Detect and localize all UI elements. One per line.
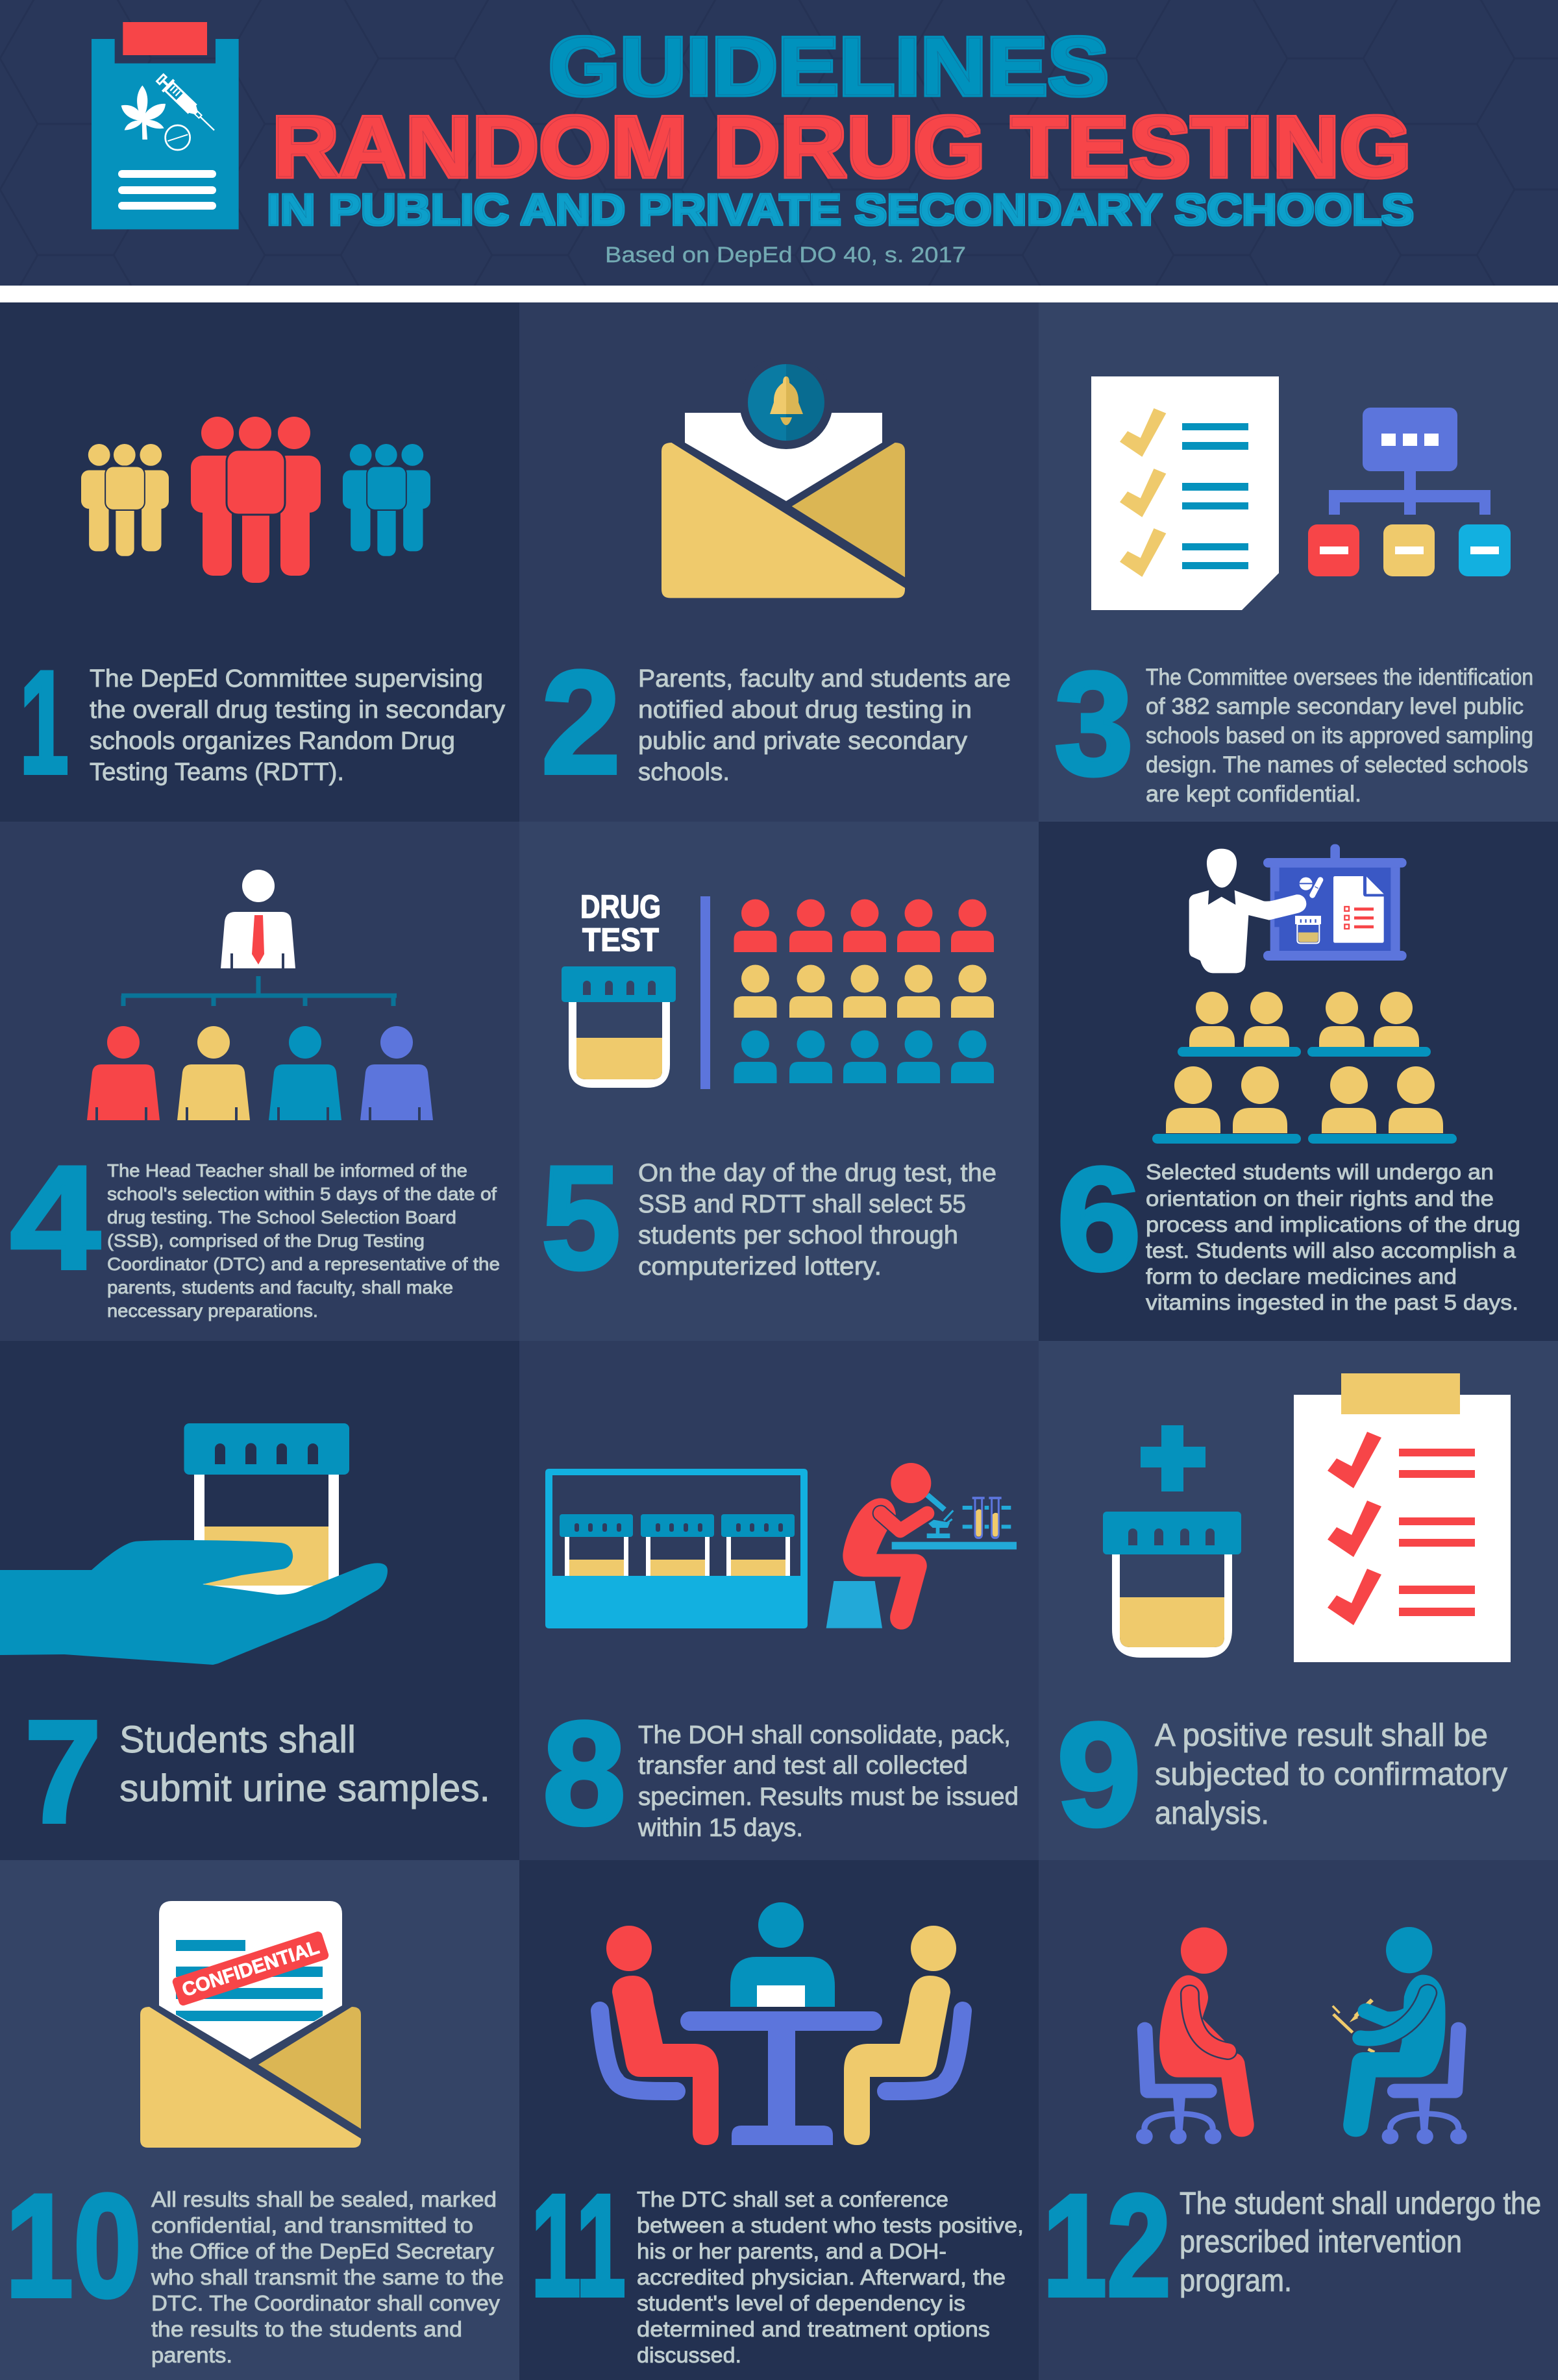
text: step 9: A positive result shall be: [1155, 1718, 1488, 1753]
number 10: 10: [5, 2163, 142, 2327]
title: Random Drug Testing: RANDOM DRUG TESTING: [272, 99, 1411, 195]
text: step 10: the results to the students and: [151, 2317, 462, 2341]
icon: clipboard with leaf, syringe and pill: [92, 22, 239, 229]
text: step 10: confidential, and transmitted to: [151, 2213, 473, 2237]
panel: step 11: [519, 1860, 1039, 2380]
text: step 3: [1146, 665, 1533, 807]
text: step 8: within 15 days.: [637, 1814, 803, 1842]
text: step 11: his or her parents, and a DOH-: [637, 2239, 946, 2263]
panel: step 8: [519, 1341, 1039, 1860]
text: step 10: who shall transmit the same to the: [151, 2265, 504, 2289]
text: step 2: schools.: [638, 759, 730, 786]
panel: step 4: [0, 822, 519, 1341]
text: step 3: are kept confidential.: [1146, 781, 1361, 807]
icon: drug test cup: DRUG: [580, 889, 661, 925]
icon: drug test cup: TEST: [582, 922, 659, 958]
title: Guidelines: GUIDELINES: [549, 20, 1109, 112]
panel: step 9: [1039, 1341, 1558, 1860]
panel: step 12: [1039, 1860, 1558, 2380]
text: step 6: [1146, 1160, 1520, 1314]
icon: drug test cup: [562, 889, 676, 1088]
text: step 9: [1155, 1718, 1507, 1831]
text: step 6: orientation on their rights and the: [1146, 1186, 1494, 1210]
text: step 9: subjected to confirmatory: [1155, 1757, 1507, 1792]
icon: organisation chart: [1308, 408, 1511, 576]
icon: student and counsellor seated: [1136, 1927, 1467, 2144]
text: step 5: students per school through: [638, 1221, 958, 1249]
icon: sealed envelope with confidential stamp: [140, 1901, 361, 2148]
text: step 4: [107, 1160, 500, 1321]
text: step 11: determined and treatment options: [637, 2317, 990, 2341]
icon: head teacher with tie over team: [87, 870, 433, 1120]
text: step 11: accredited physician. Afterward, the: [637, 2265, 1006, 2289]
text: step 12: [1180, 2187, 1541, 2298]
icon: teacher presenting board: [1189, 844, 1407, 973]
text: step 5: SSB and RDTT shall select 55: [638, 1190, 966, 1218]
panel: step 1: [0, 302, 519, 822]
text: step 2: Parents, faculty and students are: [638, 665, 1011, 693]
text: step 7: Students shall: [119, 1719, 356, 1761]
icon: conference around a table: [600, 1902, 963, 2145]
icon: box of specimen cups: [545, 1469, 808, 1628]
panel: step 6: [1039, 822, 1558, 1341]
text: step 6: form to declare medicines and: [1146, 1264, 1457, 1288]
divider bar: [700, 896, 710, 1089]
text: step 4: The Head Teacher shall be informed of the: [107, 1160, 467, 1181]
number 12: 12: [1043, 2165, 1171, 2327]
text: step 12: program.: [1180, 2264, 1292, 2298]
number 8: 8: [543, 1691, 626, 1855]
text: step 2: public and private secondary: [638, 728, 967, 755]
number 1: 1: [19, 640, 69, 804]
text: step 3: The Committee oversees the identification: [1146, 665, 1533, 690]
icon: hand holding sample cup: [0, 1423, 388, 1665]
panel: step 3: [1039, 302, 1558, 822]
number 5: 5: [541, 1135, 621, 1299]
text: step 11: student's level of dependency is: [637, 2291, 965, 2315]
number 6: 6: [1057, 1136, 1141, 1301]
subtitle: public and private schools: IN PUBLIC AND PRIVATE SECONDARY SCHOOLS: [267, 186, 1414, 234]
text: step 11: between a student who tests positive,: [637, 2213, 1024, 2237]
text: step 8: [637, 1721, 1019, 1842]
text: step 10: DTC. The Coordinator shall convey: [151, 2291, 501, 2315]
number 7: 7: [25, 1691, 101, 1853]
text: step 5: On the day of the drug test, the: [638, 1159, 996, 1187]
text: step 4: neccessary preparations.: [107, 1301, 318, 1321]
text: step 9: analysis.: [1155, 1796, 1269, 1831]
text: step 4: drug testing. The School Selection Board: [107, 1207, 456, 1227]
text: step 1: [90, 665, 505, 786]
text: step 10: All results shall be sealed, marked: [151, 2187, 497, 2211]
text: step 4: parents, students and faculty, shall make: [107, 1277, 453, 1297]
text: step 6: process and implications of the drug: [1146, 1212, 1520, 1236]
text: step 6: Selected students will undergo an: [1146, 1160, 1494, 1184]
icon: positive result cup: [1103, 1425, 1241, 1658]
source line: Based on DepEd DO 40, s. 2017: [605, 243, 966, 267]
text: step 8: specimen. Results must be issued: [638, 1783, 1019, 1811]
text: step 6: test. Students will also accomplish a: [1146, 1238, 1516, 1262]
text: step 4: school's selection within 5 days of the date of: [107, 1184, 497, 1204]
stamp: confidential: CONFIDENTIAL: [179, 1937, 322, 2001]
text: step 2: [638, 665, 1011, 786]
text: step 7: [119, 1719, 490, 1810]
text: step 1: schools organizes Random Drug: [90, 728, 455, 755]
icon: checklist document: [1091, 376, 1279, 610]
text: step 12: prescribed intervention: [1180, 2225, 1462, 2259]
text: step 1: the overall drug testing in secondary: [90, 696, 505, 724]
text: step 1: Testing Teams (RDTT).: [90, 759, 344, 786]
text: step 4: Coordinator (DTC) and a representative of the: [107, 1254, 500, 1274]
icon: seated students at desks: [1152, 992, 1457, 1144]
text: step 8: The DOH shall consolidate, pack,: [638, 1721, 1011, 1749]
text: step 11: discussed.: [637, 2343, 741, 2367]
text: step 10: parents.: [151, 2343, 232, 2367]
number 11: 11: [531, 2165, 626, 2327]
header banner: [0, 0, 1558, 286]
text: step 10: [151, 2187, 504, 2367]
icon: grid of students: [734, 900, 994, 1083]
number 3: 3: [1054, 641, 1133, 805]
text: step 8: transfer and test all collected: [638, 1752, 968, 1780]
text: step 2: notified about drug testing in: [638, 696, 972, 724]
number 9: 9: [1057, 1692, 1141, 1856]
text: step 5: [638, 1159, 996, 1281]
text: step 6: vitamins ingested in the past 5 days.: [1146, 1290, 1518, 1314]
panel: step 5: [519, 822, 1039, 1341]
text: step 3: of 382 sample secondary level public: [1146, 694, 1524, 719]
text: step 7: submit urine samples.: [119, 1767, 490, 1810]
icon: envelope with bell notification: [662, 356, 905, 598]
text: step 3: schools based on its approved sampling: [1146, 723, 1533, 748]
panel: step 7: [0, 1341, 519, 1860]
panel: step 10: [0, 1860, 519, 2380]
text: step 3: design. The names of selected schools: [1146, 752, 1528, 778]
text: step 5: computerized lottery.: [638, 1253, 882, 1281]
text: step 1: The DepEd Committee supervising: [90, 665, 483, 693]
icon: clipboard with red checks: [1294, 1373, 1511, 1662]
text: step 4: (SSB), comprised of the Drug Testing: [107, 1231, 425, 1251]
text: step 11: The DTC shall set a conference: [637, 2187, 948, 2211]
panel: step 2: [519, 302, 1039, 822]
number 4: 4: [10, 1135, 100, 1299]
icon: lab technician at microscope: [826, 1463, 1017, 1630]
text: step 11: [637, 2187, 1024, 2367]
text: step 10: the Office of the DepEd Secretary: [151, 2239, 495, 2263]
icon: three groups of people: [81, 417, 430, 583]
number 2: 2: [541, 640, 621, 804]
